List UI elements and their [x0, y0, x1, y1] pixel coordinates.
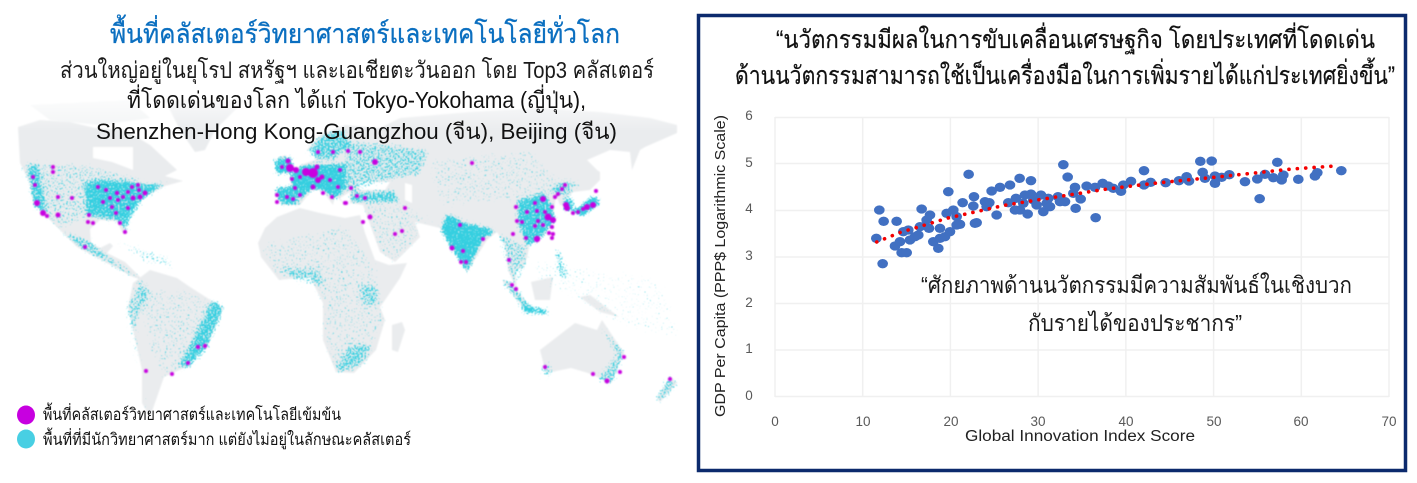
x axis tick labels: 30	[1030, 414, 1046, 429]
x axis tick labels: 20	[943, 414, 959, 429]
map: cluster hot spots	[31, 149, 672, 384]
map: land masses	[18, 100, 677, 417]
data points right half	[1043, 156, 1347, 222]
subtitle line 2: ที่โดดเด่นของโลก ได้แก่ Tokyo-Yokohama (ญี่ปุ่น),	[127, 84, 586, 114]
scatter chart: GDP per capita vs innovation index	[713, 108, 1397, 445]
map: inland seas	[93, 147, 412, 203]
y axis tick labels: 4	[745, 201, 753, 216]
y axis tick labels: 2	[745, 295, 753, 310]
red dotted trend line	[877, 166, 1335, 242]
title: science and technology clusters: พื้นที่คลัสเตอร์วิทยาศาสตร์และเทคโนโลยีทั่วโลก	[110, 14, 620, 49]
y axis tick labels	[745, 108, 753, 403]
y axis tick labels: 5	[745, 155, 753, 170]
x axis tick labels: 0	[771, 414, 779, 429]
x axis tick labels: 50	[1206, 414, 1222, 429]
panel: world map of science and technology clusters	[0, 90, 695, 417]
x axis tick labels: 60	[1293, 414, 1309, 429]
legend: map colour key	[17, 402, 411, 450]
x axis tick labels: 40	[1118, 414, 1134, 429]
legend icon: cluster area	[17, 406, 35, 424]
x axis tick labels: 10	[855, 414, 871, 429]
map: fade behind heading text	[0, 90, 695, 132]
x axis tick labels	[771, 414, 1397, 429]
x axis title: Global Innovation Index Score	[965, 428, 1195, 445]
map: scientist density speckle	[20, 128, 680, 417]
y axis tick labels: 3	[745, 248, 753, 263]
x axis tick labels: 70	[1381, 414, 1397, 429]
callout line 1: “ศักยภาพด้านนวัตกรรมมีความสัมพันธ์ในเชิงบวก	[921, 272, 1352, 298]
panel: innovation frame	[698, 16, 1406, 470]
y axis tick labels: 6	[745, 108, 753, 123]
callout line 2: กับรายได้ของประชากร”	[1028, 310, 1242, 336]
y axis tick labels: 1	[745, 341, 753, 356]
chart grid	[775, 117, 1389, 397]
subtitle line 1: ส่วนใหญ่อยู่ในยุโรป สหรัฐฯ และเอเชียตะวันออก โดย Top3 คลัสเตอร์	[60, 57, 654, 84]
data points left half	[871, 170, 1052, 268]
legend label: many scientists: พื้นที่ที่มีนักวิทยาศาสตร์มาก แต่ยังไม่อยู่ในลักษณะคลัสเตอร์	[43, 427, 411, 450]
legend label: cluster area: พื้นที่คลัสเตอร์วิทยาศาสตร์และเทคโนโลยีเข้มข้น	[43, 402, 341, 424]
y axis tick labels: 0	[745, 388, 753, 403]
legend icon: many scientists	[17, 430, 35, 448]
y axis title: GDP Per Capita (PPP$ Logarithmic Scale)	[713, 115, 729, 417]
subtitle line 3: Shenzhen-Hong Kong-Guangzhou (จีน), Beijing (จีน)	[96, 119, 617, 144]
